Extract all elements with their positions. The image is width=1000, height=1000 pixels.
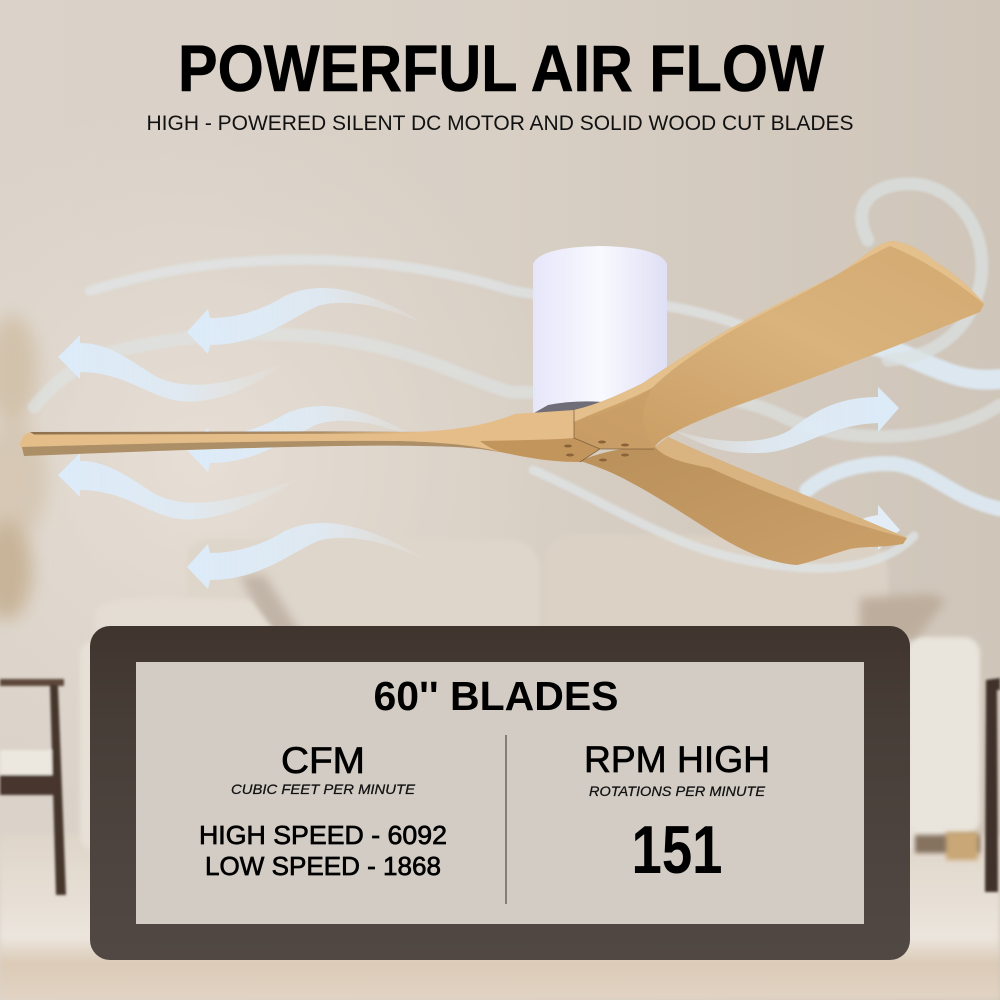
arrow: top centre left [187, 288, 430, 354]
sofa [80, 534, 980, 860]
RPM caption: ROTATIONS PER MINUTE [589, 783, 766, 799]
blade: left [20, 410, 600, 462]
CFM label: CFM [281, 740, 365, 781]
hub seams and bolts [564, 410, 654, 462]
low speed value: LOW SPEED - 1868 [205, 851, 441, 881]
title: POWERFUL AIR FLOW [178, 31, 825, 105]
blades heading: 60'' BLADES [374, 673, 618, 719]
arrow: bottom left [187, 523, 430, 589]
high speed value: HIGH SPEED - 6092 [199, 820, 447, 850]
blade: right upper [574, 241, 984, 449]
motor housing [533, 246, 667, 425]
ceiling fan [20, 241, 984, 565]
subtitle: HIGH - POWERED SILENT DC MOTOR AND SOLID WOOD CUT BLADES [146, 112, 854, 135]
RPM label: RPM HIGH [584, 739, 770, 780]
right chair [985, 678, 1000, 892]
arrow: upper left [58, 335, 285, 401]
light inner card [136, 662, 864, 924]
faint air flow bands [34, 184, 1000, 568]
air arrows [58, 288, 900, 589]
dried pampas plant [0, 315, 48, 620]
blade: right lower [580, 437, 907, 565]
arrow: lower left [58, 453, 300, 519]
dark info panel [90, 626, 910, 960]
swirl [862, 184, 982, 360]
left chair [0, 679, 66, 895]
arrow: right lower [855, 505, 900, 550]
arrow: middle centre left [187, 406, 430, 472]
arrow: right upper [673, 387, 899, 453]
RPM value: 151 [632, 812, 722, 888]
divider [505, 735, 507, 904]
CFM caption: CUBIC FEET PER MINUTE [231, 781, 416, 797]
